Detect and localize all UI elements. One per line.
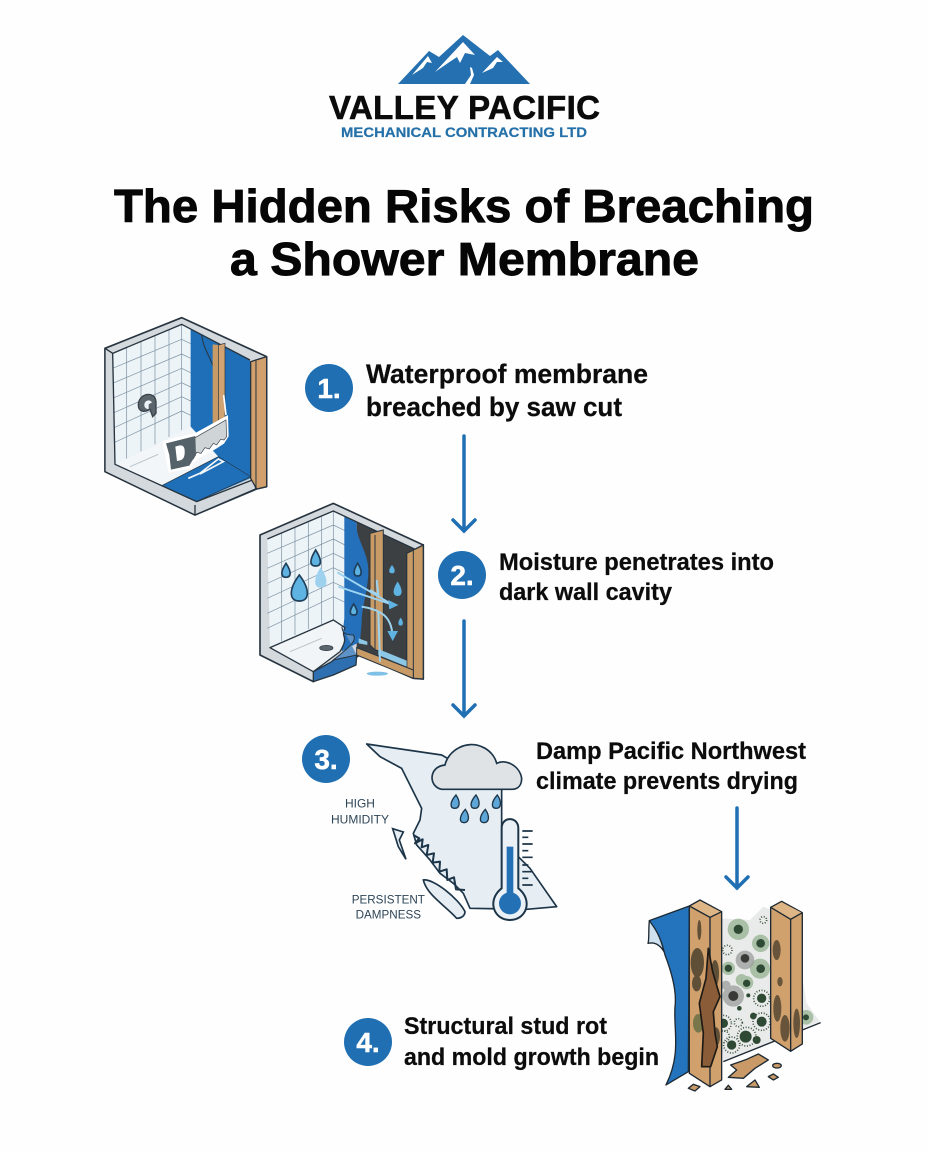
company logo [329,35,600,140]
stud: right [251,357,267,489]
label: persistent dampness: DAMPNESS [356,909,421,922]
step 2 text: dark wall cavity [499,579,672,606]
step 3 text: climate prevents drying [536,768,798,795]
step 2 [438,549,774,606]
rotted stud [689,900,722,1087]
title [114,180,814,285]
logo subtitle: MECHANICAL CONTRACTING LTD [341,125,587,140]
step 4 text: Structural stud rot [404,1013,607,1040]
badge 2 [438,551,486,599]
badge 1 [305,364,353,412]
map: British Columbia [367,744,557,918]
icon: rain cloud [432,745,522,823]
illustration: shower wall with saw cutting membrane [105,318,267,515]
moisture arrows [337,572,398,662]
wall cavity [357,522,417,672]
icon: mountains [398,35,530,84]
icon: hand saw [163,415,229,478]
step 1 text: breached by saw cut [366,392,622,422]
icon: shower valve [138,394,156,417]
badge 3 [302,735,350,783]
step 1 text: Waterproof membrane [366,359,648,389]
moldy wall [715,907,821,1062]
peeling membrane [648,906,689,1085]
label: high humidity: HUMIDITY [331,812,389,826]
step 1 [305,359,648,422]
illustration: BC climate map [331,744,557,922]
title: The Hidden Risks of Breaching [114,180,814,232]
icon: thermometer [493,819,533,920]
illustration: moisture entering wall cavity [260,503,423,682]
water drops [282,550,403,626]
stud: left [213,343,226,425]
step 2 text: Moisture penetrates into [499,549,774,576]
illustration: rotted studs and mold [648,900,821,1091]
label: high humidity: HIGH [345,796,375,810]
arrow: step 3 to 4 [726,808,748,888]
studs and plate [357,530,423,679]
step 4 text: and mold growth begin [404,1044,659,1071]
badge 4 [344,1018,392,1066]
badge 3: 3. [314,744,338,775]
step 3 [302,735,806,795]
step 3 text: Damp Pacific Northwest [536,738,806,765]
logo wordmark: VALLEY PACIFIC [329,89,600,126]
arrow: step 1 to 2 [453,436,475,531]
label: persistent dampness: PERSISTENT [352,893,425,906]
wood debris [688,1054,781,1091]
badge 4: 4. [356,1027,380,1058]
title: a Shower Membrane [230,233,699,285]
arrow: step 2 to 3 [453,621,475,716]
badge 1: 1. [317,373,341,404]
badge 2: 2. [450,560,474,591]
right stud [771,901,802,1051]
step 4 [344,1013,659,1071]
